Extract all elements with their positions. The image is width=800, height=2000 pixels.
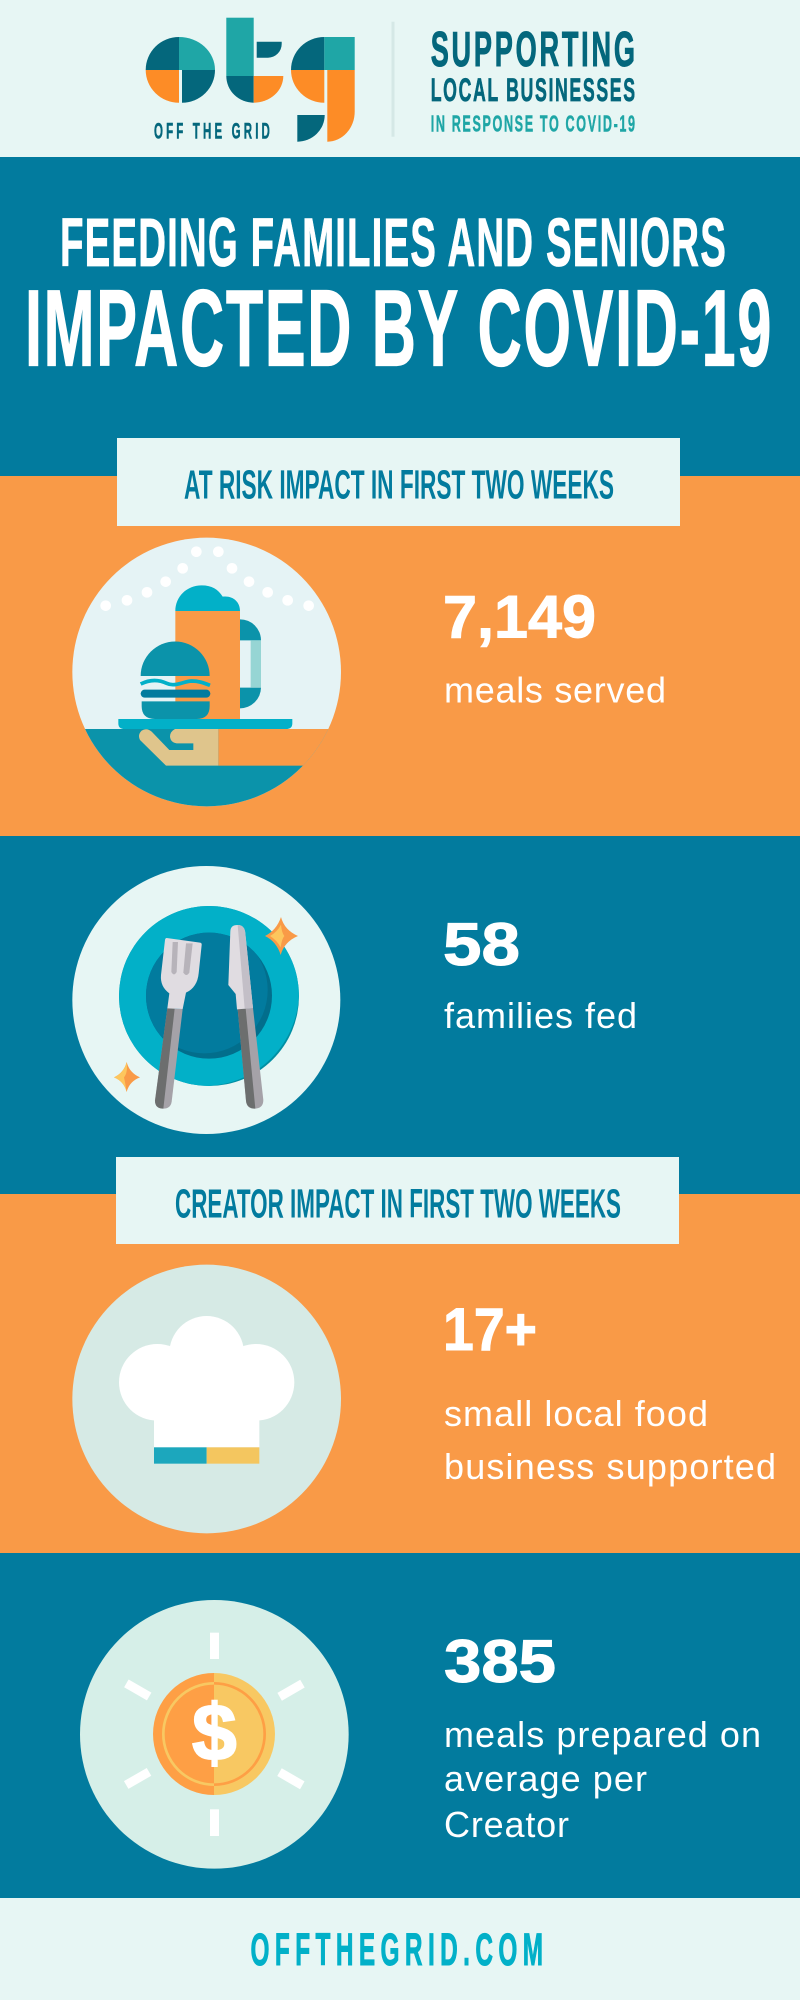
label: small local food business supported: small local food — [444, 1393, 708, 1434]
label: families fed: families fed — [444, 995, 637, 1036]
logo letter g — [291, 37, 355, 142]
panel: meals per creator — [80, 1600, 761, 1869]
icon: plate with fork and knife — [72, 866, 340, 1134]
panel: meals served — [72, 538, 664, 806]
banner: at risk impact — [117, 438, 680, 526]
fork — [155, 1008, 183, 1109]
header tagline: IN RESPONSE TO COVID-19 — [431, 111, 637, 137]
header tagline: SUPPORTING — [431, 23, 638, 77]
logo letter o — [146, 37, 215, 103]
stat: 7,149: 7,149 — [443, 584, 596, 651]
title — [25, 204, 773, 390]
header tagline: LOCAL BUSINESSES — [431, 72, 637, 108]
label: meals served: meals served — [444, 670, 666, 710]
panel: families fed — [72, 866, 637, 1134]
label: meals prepared on average per Creator — [444, 1714, 761, 1845]
label: meals prepared on average per Creator: average per — [444, 1758, 647, 1799]
knife — [238, 1008, 263, 1109]
stat: 17+: 17+ — [443, 1296, 537, 1363]
header divider — [392, 22, 394, 137]
header tagline — [431, 23, 638, 137]
label: small local food business supported — [444, 1393, 776, 1487]
icon: dollar coin: $ — [192, 1688, 237, 1777]
logo wordmark: OFF THE GRID — [154, 118, 273, 143]
header logo — [146, 18, 355, 143]
icon: chef hat — [72, 1265, 341, 1533]
stat: 58: 58 — [443, 911, 520, 978]
panel: local businesses supported — [72, 1265, 776, 1533]
logo letter t — [226, 18, 283, 103]
label: meals prepared on average per Creator: Creator — [444, 1804, 569, 1845]
sparkles — [265, 917, 298, 955]
footer url: OFFTHEGRID.COM — [250, 1924, 548, 1975]
label: small local food business supported: business supported — [444, 1446, 776, 1487]
icon: dollar coin — [80, 1600, 349, 1869]
label: meals prepared on average per Creator: meals prepared on — [444, 1714, 761, 1755]
stat: 385: 385 — [444, 1628, 556, 1695]
banner: creator impact — [116, 1157, 679, 1244]
icon: burger and drink on tray — [72, 538, 341, 806]
